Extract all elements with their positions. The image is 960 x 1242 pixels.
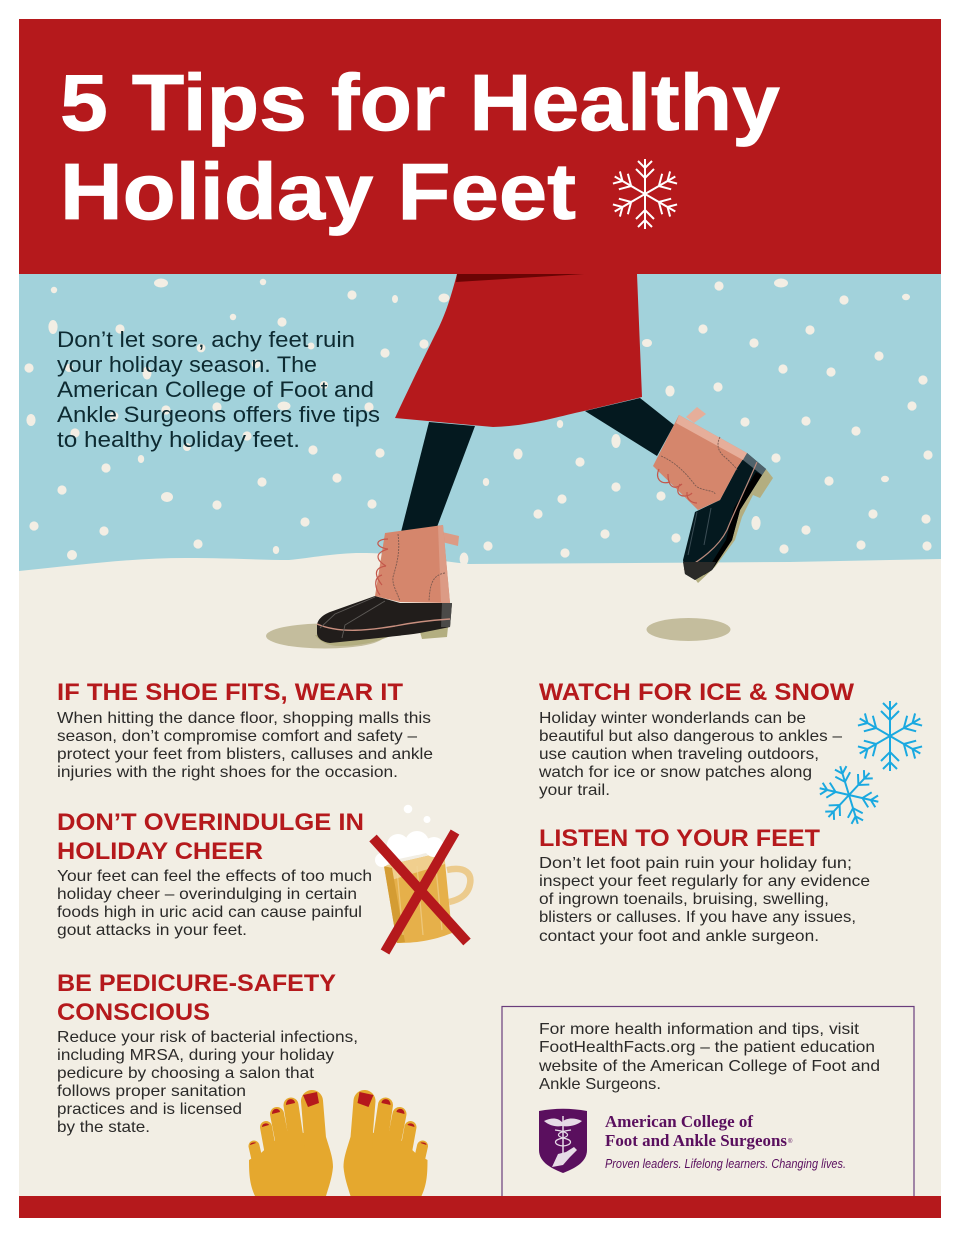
tip text [57, 1029, 358, 1136]
tip text: contact your foot and ankle surgeon. [539, 928, 819, 945]
skirt [395, 274, 642, 427]
tip text: gout attacks in your feet. [57, 922, 247, 939]
title [60, 58, 781, 236]
panel: snowy ground [19, 553, 941, 1218]
icon: small blue snowflake [812, 757, 886, 833]
left foot [249, 1092, 333, 1196]
tip text: watch for ice or snow patches along [538, 764, 812, 781]
tip text: beautiful but also dangerous to ankles – [539, 728, 842, 745]
tip text: protect your feet from blisters, calluses and ankle [57, 746, 433, 763]
tip text: injuries with the right shoes for the occasion. [57, 764, 398, 781]
heading: WATCH FOR ICE & SNOW [539, 679, 855, 706]
tip text: Reduce your risk of bacterial infections, [57, 1029, 358, 1046]
tip text: follows proper sanitation [57, 1083, 246, 1100]
tip text: season, don’t compromise comfort and safety – [57, 728, 417, 745]
tip text: use caution when traveling outdoors, [539, 746, 819, 763]
title: 5 Tips for Healthy [60, 58, 781, 147]
intro text: American College of Foot and [57, 377, 374, 402]
tip text [57, 710, 433, 781]
tip text: your trail. [539, 782, 610, 799]
intro text: to healthy holiday feet. [57, 427, 300, 452]
tip text: holiday cheer – overindulging in certain [57, 886, 357, 903]
heading: IF THE SHOE FITS, WEAR IT [57, 679, 403, 706]
heading: HOLIDAY CHEER [57, 838, 263, 865]
tip text: by the state. [57, 1119, 150, 1136]
tip text: Don’t let foot pain ruin your holiday fun; [539, 855, 852, 872]
tip text [538, 710, 842, 799]
information text: website of the American College of Foot and [538, 1058, 880, 1075]
ground shadows [266, 618, 730, 648]
logo tagline: Proven leaders. Lifelong learners. Changing lives. [605, 1157, 846, 1171]
panel: more information box [502, 1006, 914, 1202]
title: Holiday Feet [60, 147, 576, 236]
intro text: Ankle Surgeons offers five tips [57, 402, 380, 427]
tip text [57, 868, 372, 939]
icon: large blue snowflake [855, 701, 925, 771]
intro text [57, 327, 380, 452]
panel: tip - listen to your feet [539, 825, 870, 945]
tip text: including MRSA, during your holiday [57, 1047, 334, 1064]
heading [57, 970, 336, 1026]
panel: title banner [19, 19, 941, 274]
footer bar [19, 1196, 941, 1218]
tip text: Holiday winter wonderlands can be [539, 710, 806, 727]
logo wordmark: American College of [605, 1112, 753, 1131]
heading: CONSCIOUS [57, 999, 210, 1026]
front leg [401, 422, 475, 532]
logo wordmark: ® [788, 1138, 793, 1145]
tip text: of ingrown toenails, bruising, swelling, [539, 891, 829, 908]
intro text: Don’t let sore, achy feet ruin [57, 327, 355, 352]
tip text: blisters or calluses. If you have any issues, [539, 909, 856, 926]
information text: FootHealthFacts.org – the patient education [539, 1039, 875, 1056]
icon: white snowflake [610, 159, 680, 229]
heading: LISTEN TO YOUR FEET [539, 825, 820, 852]
information text: For more health information and tips, visit [539, 1021, 860, 1038]
tip text [539, 855, 870, 945]
panel: snowy scene background [19, 270, 941, 575]
snowfall dots [24, 278, 933, 566]
tip text: When hitting the dance floor, shopping malls this [57, 710, 431, 727]
intro text: your holiday season. The [57, 352, 317, 377]
heading [57, 809, 364, 865]
icon: college shield logo [539, 1109, 587, 1173]
illustration: walking figure in boots [266, 274, 773, 648]
back boot [653, 407, 773, 583]
panel: tip - watch for ice and snow [538, 679, 855, 799]
logo wordmark: Foot and Ankle Surgeons [605, 1131, 787, 1150]
tip text: inspect your feet regularly for any evidence [539, 873, 870, 890]
tip text: pedicure by choosing a salon that [57, 1065, 315, 1082]
information text [538, 1021, 880, 1093]
panel: tip - pedicure safety [57, 970, 358, 1136]
logo wordmark [605, 1112, 793, 1150]
icon: crossed-out beer mug [373, 805, 470, 952]
heading: DON’T OVERINDULGE IN [57, 809, 364, 836]
information text: Ankle Surgeons. [539, 1076, 661, 1093]
right foot [344, 1092, 428, 1196]
tip text: practices and is licensed [57, 1101, 242, 1118]
panel: tip - if the shoe fits [57, 679, 433, 781]
tip text: foods high in uric acid can cause painful [57, 904, 362, 921]
back leg [585, 398, 674, 456]
panel: tip - don't overindulge [57, 809, 372, 939]
icon: feet with painted toenails [249, 1092, 428, 1196]
front boot [315, 525, 459, 646]
heading: BE PEDICURE-SAFETY [57, 970, 336, 997]
tip text: Your feet can feel the effects of too much [57, 868, 372, 885]
